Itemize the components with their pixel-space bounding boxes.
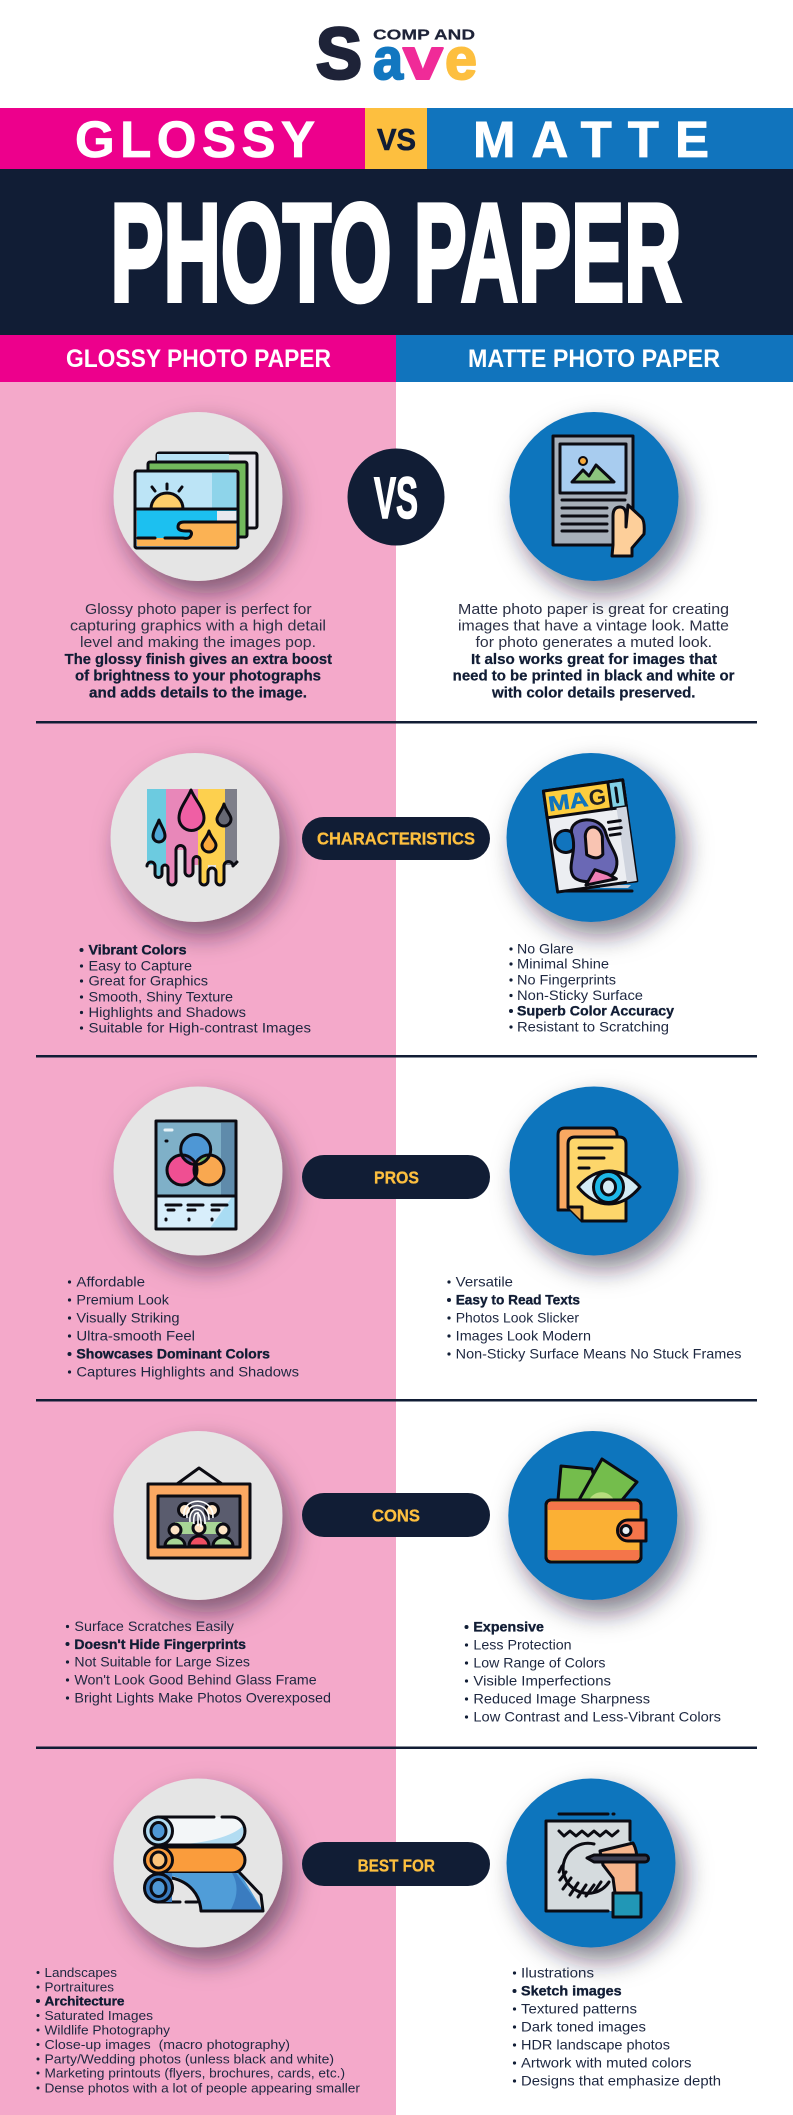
vs badge	[348, 448, 444, 546]
glossy pros list: Visually Striking	[76, 1310, 180, 1326]
matte cons list: Reduced Image Sharpness	[473, 1690, 650, 1706]
glossy best for list: Wildlife Photography	[44, 2022, 171, 2038]
glossy cons list: Won't Look Good Behind Glass Frame	[74, 1672, 317, 1688]
matte pros list: Images Look Modern	[456, 1328, 591, 1344]
glossy description: of brightness to your photographs	[75, 668, 321, 684]
glossy cons list: Surface Scratches Easily	[74, 1618, 234, 1634]
matte circle with document and eye icon	[510, 1086, 678, 1256]
matte best for list	[512, 1964, 721, 2088]
matte pros list: Non-Sticky Surface Means No Stuck Frames	[456, 1346, 742, 1362]
glossy best for list: Architecture	[44, 1994, 124, 2008]
glossy pros list: Premium Look	[76, 1292, 170, 1308]
characteristics pill	[302, 817, 490, 860]
matte description: Matte photo paper is great for creating	[458, 602, 729, 618]
matte description	[453, 602, 735, 702]
matte description: for photo generates a muted look.	[476, 635, 712, 651]
glossy pros list: Affordable	[76, 1274, 145, 1290]
matte characteristics list: Resistant to Scratching	[517, 1018, 669, 1034]
glossy characteristics list: Smooth, Shiny Texture	[88, 988, 233, 1004]
logo: Comp and Save: COMP AND	[373, 26, 475, 44]
matte description: need to be printed in black and white or	[453, 668, 735, 684]
matte characteristics list: Non-Sticky Surface	[517, 987, 643, 1003]
matte best for list: Ilustrations	[521, 1964, 594, 1980]
matte best for list: Designs that emphasize depth	[521, 2072, 721, 2088]
characteristics pill: CHARACTERISTICS	[317, 828, 475, 848]
glossy description: capturing graphics with a high detail	[70, 618, 326, 634]
matte circle with document icon	[510, 412, 678, 581]
glossy best for list: Dense photos with a lot of people appearing smaller	[44, 2080, 361, 2096]
matte circle with sketch icon	[506, 1778, 676, 1948]
matte cons list: Low Contrast and Less-Vibrant Colors	[473, 1708, 721, 1724]
glossy circle with photos icon	[114, 412, 282, 581]
title band: glossy vs matte	[0, 108, 793, 169]
matte best for list: Sketch images	[521, 1982, 622, 1998]
glossy cons list: Bright Lights Make Photos Overexposed	[74, 1690, 331, 1706]
matte characteristics list	[509, 940, 674, 1034]
glossy best for list: Landscapes	[44, 1965, 118, 1980]
column headers	[0, 335, 793, 382]
glossy circle with paper rolls icon	[114, 1778, 282, 1948]
title band: glossy vs matte: MATTE	[473, 111, 709, 168]
glossy circle with colour poster icon	[114, 1086, 282, 1256]
cons pill: CONS	[372, 1506, 420, 1526]
logo: Comp and Save: v	[403, 27, 443, 92]
matte best for list: Artwork with muted colors	[521, 2054, 691, 2070]
panel: characteristics	[80, 753, 676, 1036]
matte best for list: Textured patterns	[521, 2000, 637, 2016]
glossy pros list: Captures Highlights and Shadows	[76, 1364, 299, 1380]
matte circle with magazine icon: G	[587, 784, 608, 811]
title band: glossy vs matte: VS	[377, 122, 416, 157]
matte best for list: HDR landscape photos	[521, 2036, 670, 2052]
best for pill	[302, 1842, 490, 1886]
matte characteristics list: Minimal Shine	[517, 956, 609, 972]
glossy best for list: Saturated Images	[44, 2008, 154, 2023]
panel: best for	[36, 1778, 721, 2096]
glossy best for list: Close-up images (macro photography)	[44, 2037, 290, 2052]
matte pros list	[447, 1274, 742, 1362]
matte description: with color details preserved.	[491, 686, 696, 702]
matte circle with wallet icon	[508, 1431, 677, 1600]
glossy characteristics list: Great for Graphics	[88, 972, 208, 988]
glossy cons list: Not Suitable for Large Sizes	[74, 1654, 250, 1670]
matte cons list: Visible Imperfections	[473, 1672, 611, 1688]
glossy best for list: Marketing printouts (flyers, brochures, cards, etc.)	[44, 2066, 345, 2080]
glossy characteristics list: Highlights and Shadows	[88, 1004, 246, 1020]
matte circle with magazine icon: MA	[547, 788, 590, 816]
glossy cons list: Doesn't Hide Fingerprints	[74, 1636, 246, 1652]
logo: Comp and Save: e	[445, 27, 477, 92]
matte characteristics list: Superb Color Accuracy	[517, 1002, 674, 1018]
glossy best for list: Party/Wedding photos (unless black and white)	[44, 2052, 334, 2066]
panel: pros	[68, 1086, 742, 1380]
panel: intro	[65, 412, 735, 702]
glossy pros list: Showcases Dominant Colors	[76, 1346, 270, 1362]
glossy circle with ink icon	[110, 753, 280, 922]
glossy description: Glossy photo paper is perfect for	[85, 602, 312, 618]
column headers: MATTE PHOTO PAPER	[468, 345, 720, 373]
glossy pros list	[68, 1274, 299, 1380]
matte characteristics list: No Fingerprints	[517, 972, 616, 988]
matte pros list: Easy to Read Texts	[456, 1292, 580, 1308]
matte cons list: Low Range of Colors	[473, 1654, 606, 1670]
glossy circle with fingerprint frame icon	[114, 1431, 282, 1600]
best for pill: BEST FOR	[358, 1856, 435, 1876]
matte best for list: Dark toned images	[521, 2018, 646, 2034]
glossy description: and adds details to the image.	[89, 686, 307, 702]
logo: Comp and Save: a	[373, 27, 404, 92]
glossy characteristics list: Suitable for High-contrast Images	[88, 1020, 311, 1036]
panel: cons	[66, 1431, 721, 1724]
matte pros list: Versatile	[456, 1274, 513, 1290]
vs badge: VS	[374, 466, 418, 531]
matte circle with magazine icon	[506, 753, 676, 922]
glossy characteristics list	[80, 942, 311, 1036]
cons pill	[302, 1493, 490, 1537]
glossy description: level and making the images pop.	[80, 635, 316, 651]
glossy pros list: Ultra-smooth Feel	[76, 1328, 195, 1344]
title band: glossy vs matte: GLOSSY	[75, 111, 315, 168]
glossy characteristics list: Easy to Capture	[88, 958, 192, 974]
matte description: images that have a vintage look. Matte	[458, 618, 729, 634]
pros pill: PROS	[374, 1168, 419, 1188]
logo: Comp and Save	[316, 14, 477, 94]
matte characteristics list: No Glare	[517, 940, 574, 956]
glossy characteristics list: Vibrant Colors	[88, 942, 187, 958]
glossy description	[65, 602, 332, 702]
pros pill	[302, 1155, 490, 1199]
column headers: GLOSSY PHOTO PAPER	[66, 345, 331, 373]
glossy best for list	[36, 1965, 361, 2096]
glossy best for list: Portraitures	[44, 1980, 115, 1994]
matte description: It also works great for images that	[471, 652, 717, 668]
pink glossy column background	[0, 382, 396, 2115]
matte cons list: Less Protection	[473, 1636, 572, 1652]
glossy description: The glossy finish gives an extra boost	[65, 652, 332, 668]
matte pros list: Photos Look Slicker	[456, 1310, 579, 1326]
glossy cons list	[66, 1618, 331, 1706]
matte cons list	[464, 1618, 721, 1724]
matte cons list: Expensive	[473, 1618, 544, 1634]
logo: Comp and Save: S	[316, 14, 362, 94]
